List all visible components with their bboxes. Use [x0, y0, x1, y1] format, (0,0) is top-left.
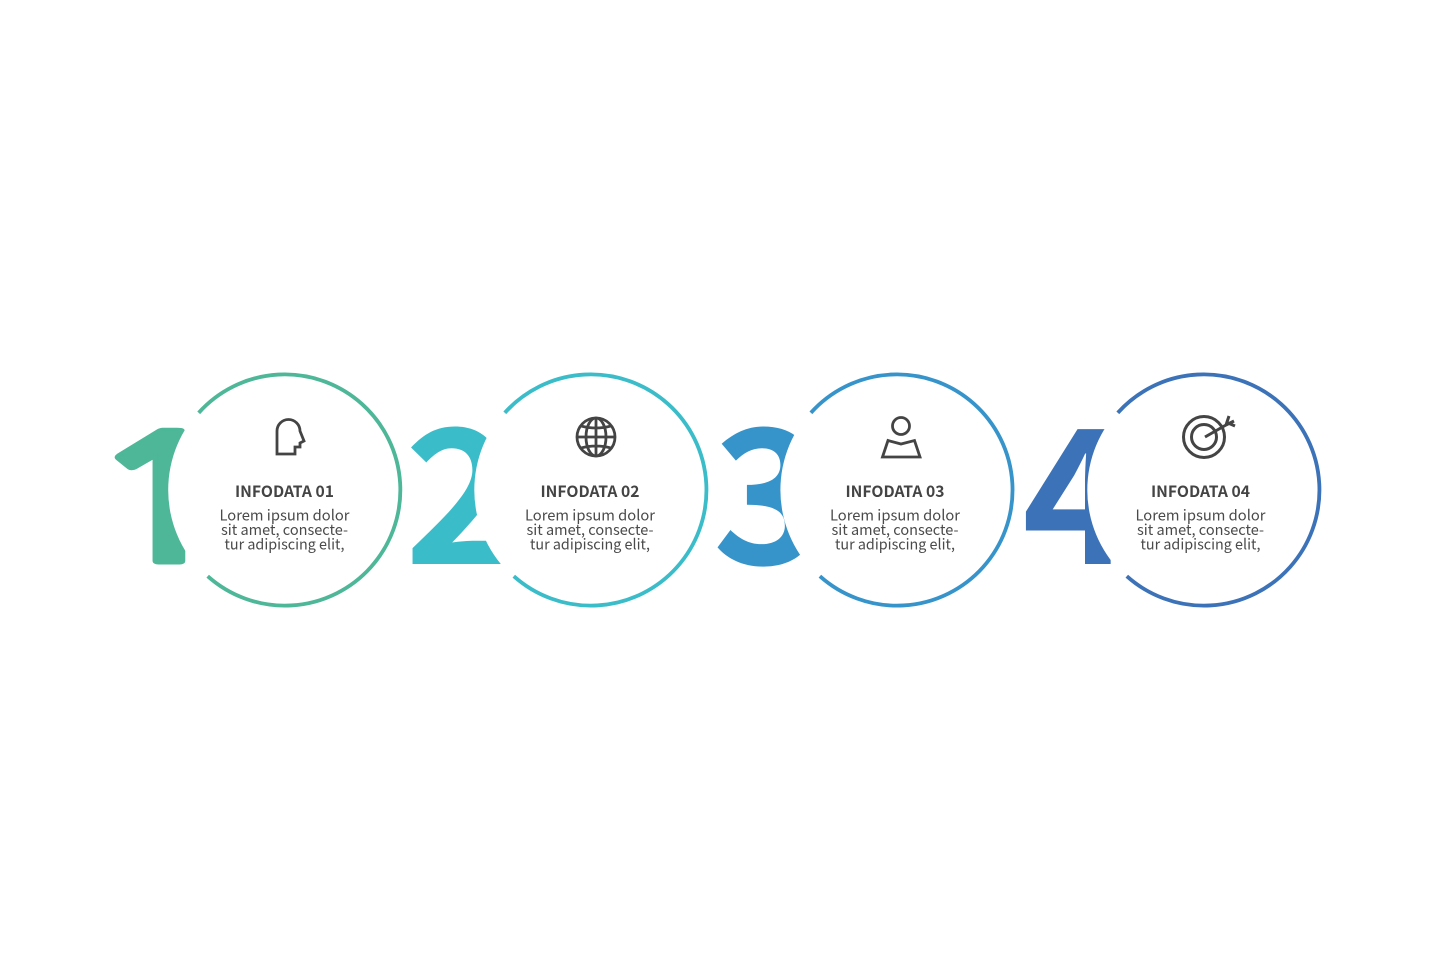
text block 4: sit amet, consecte-: [1137, 519, 1264, 540]
heading 2: INFODATA 02: [540, 479, 640, 502]
text block 4: [1136, 504, 1266, 554]
text block 2: [525, 504, 655, 554]
number 3: 3: [713, 347, 823, 618]
heading 3: INFODATA 03: [846, 479, 944, 502]
number 1: 1: [83, 415, 243, 589]
text block 3: sit amet, consecte-: [832, 519, 958, 540]
text block 3: Lorem ipsum dolor: [830, 504, 960, 526]
panel: step 1: [83, 374, 401, 606]
text block 4: Lorem ipsum dolor: [1136, 504, 1266, 526]
text block 3: [830, 504, 960, 554]
heading 1: INFODATA 01: [235, 479, 334, 502]
number 2: 2: [404, 347, 515, 618]
text block 2: sit amet, consecte-: [526, 519, 654, 540]
text block 1: sit amet, consecte-: [221, 519, 348, 540]
icon: head: [277, 420, 304, 454]
text block 2: tur adipiscing elit,: [530, 534, 650, 554]
ring 1: [199, 374, 400, 606]
text block 3: tur adipiscing elit,: [835, 534, 955, 554]
ring 3: [811, 374, 1013, 606]
text block 4: tur adipiscing elit,: [1140, 534, 1260, 554]
heading 4: INFODATA 04: [1151, 479, 1250, 502]
text block 2: Lorem ipsum dolor: [525, 504, 655, 526]
icon: target with arrow: [1184, 416, 1235, 458]
number 4: 4: [1022, 347, 1132, 618]
text block 1: Lorem ipsum dolor: [220, 504, 350, 526]
ring 4: [1118, 374, 1319, 606]
panel: step 4: [1022, 347, 1320, 618]
text block 1: [220, 504, 350, 554]
text block 1: tur adipiscing elit,: [224, 534, 344, 554]
icon: globe: [577, 418, 615, 456]
panel: step 3: [713, 347, 1013, 618]
panel: step 2: [404, 347, 707, 618]
icon: person with map: [882, 418, 920, 457]
ring 2: [505, 374, 706, 606]
